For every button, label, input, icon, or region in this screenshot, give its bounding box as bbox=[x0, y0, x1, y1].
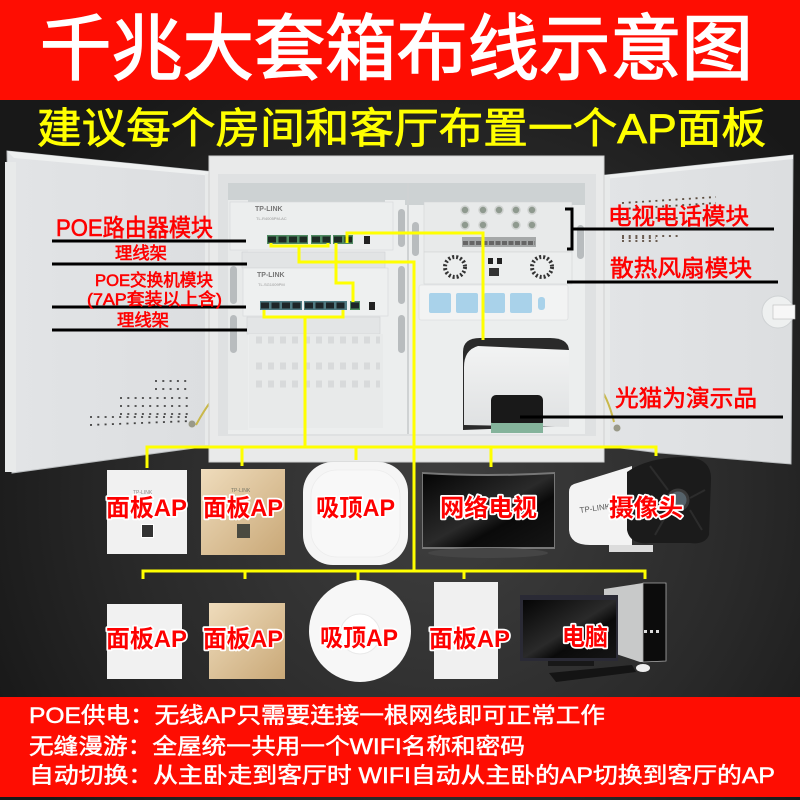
device: white panel AP: TP-LINK bbox=[133, 490, 153, 496]
device: camera bbox=[569, 457, 711, 552]
device: gold panel AP bbox=[201, 469, 285, 555]
device: desktop computer bbox=[520, 583, 666, 682]
title: 千兆大套箱布线示意图 bbox=[40, 10, 753, 90]
device: network TV: 网络电视 bbox=[440, 494, 537, 522]
device: gold panel AP row 2: 面板AP bbox=[203, 626, 283, 653]
black leader lines bbox=[52, 209, 783, 417]
mesh panel bbox=[249, 334, 383, 428]
cable shelf 1 bbox=[242, 252, 385, 268]
device: gold panel AP row 2 bbox=[203, 603, 285, 679]
left cabinet door bbox=[5, 151, 238, 473]
optical modem bbox=[463, 338, 569, 433]
yellow cable bus row 1 bbox=[147, 447, 656, 468]
feature: seamless roaming: 无缝漫游：全屋统一共用一个WIFI名称和密码 bbox=[29, 734, 525, 759]
label: POE switch module: POE交换机模块 bbox=[95, 271, 213, 290]
POE router module: TP-LINK bbox=[255, 206, 283, 213]
device: desktop computer: 电脑 bbox=[562, 624, 608, 651]
right cabinet door bbox=[584, 155, 795, 464]
device: white panel AP row 2 bbox=[106, 604, 187, 679]
device: tall panel AP: 面板AP bbox=[429, 626, 510, 653]
label: TV phone module: 电视电话模块 bbox=[608, 203, 749, 229]
label: 7AP note: (7AP套装以上含) bbox=[87, 290, 222, 309]
yellow cable bus row 2 bbox=[143, 446, 645, 580]
title banner bbox=[0, 0, 800, 100]
subtitle: 建议每个房间和客厅布置一个AP面板 bbox=[37, 105, 766, 152]
device: round ceiling AP: 吸顶AP bbox=[320, 625, 398, 652]
device: camera: TP-LINK bbox=[579, 502, 611, 515]
door latch bbox=[762, 296, 795, 328]
label: fan module: 散热风扇模块 bbox=[610, 255, 752, 281]
feature: auto switching: 自动切换：从主卧走到客厅时 WIFI自动从主卧的AP切换到客厅的AP bbox=[29, 763, 775, 788]
device: camera: 摄像头 bbox=[609, 495, 683, 522]
fan module bbox=[424, 252, 572, 284]
POE router module bbox=[230, 202, 393, 250]
power strip bbox=[419, 285, 568, 320]
device: gold panel AP: TP-LINK bbox=[231, 488, 251, 494]
device: round ceiling AP bbox=[309, 580, 411, 682]
label: cable shelf 2: 理线架 bbox=[117, 311, 169, 330]
cable shelf 2 bbox=[247, 317, 380, 334]
POE switch module: TL-SG1009PM bbox=[258, 282, 285, 287]
yellow network cables in cabinet bbox=[264, 233, 483, 446]
device: white panel AP row 2: 面板AP bbox=[106, 626, 187, 653]
device: tall panel AP bbox=[429, 582, 510, 679]
feature: POE power: POE供电：无线AP只需要连接一根网线即可正常工作 bbox=[29, 703, 605, 728]
device: white panel AP: 面板AP bbox=[106, 495, 187, 522]
device: gold panel AP: 面板AP bbox=[203, 495, 283, 522]
label: POE router module: POE路由器模块 bbox=[56, 215, 213, 242]
device: white panel AP bbox=[106, 470, 187, 554]
bottom feature panel bbox=[0, 697, 800, 797]
POE switch module: TP-LINK bbox=[257, 272, 285, 279]
POE router module: TL-R4005PM-AC bbox=[256, 216, 287, 221]
POE switch module bbox=[243, 268, 388, 316]
device: network TV bbox=[422, 472, 555, 558]
label: modem demo: 光猫为演示品 bbox=[615, 385, 757, 411]
cabinet body bbox=[209, 156, 604, 462]
TV and telephone module bbox=[424, 202, 572, 252]
label: cable shelf 1: 理线架 bbox=[115, 244, 167, 263]
device: ceiling AP square bbox=[303, 462, 408, 565]
device: ceiling AP square: 吸顶AP bbox=[316, 495, 395, 522]
